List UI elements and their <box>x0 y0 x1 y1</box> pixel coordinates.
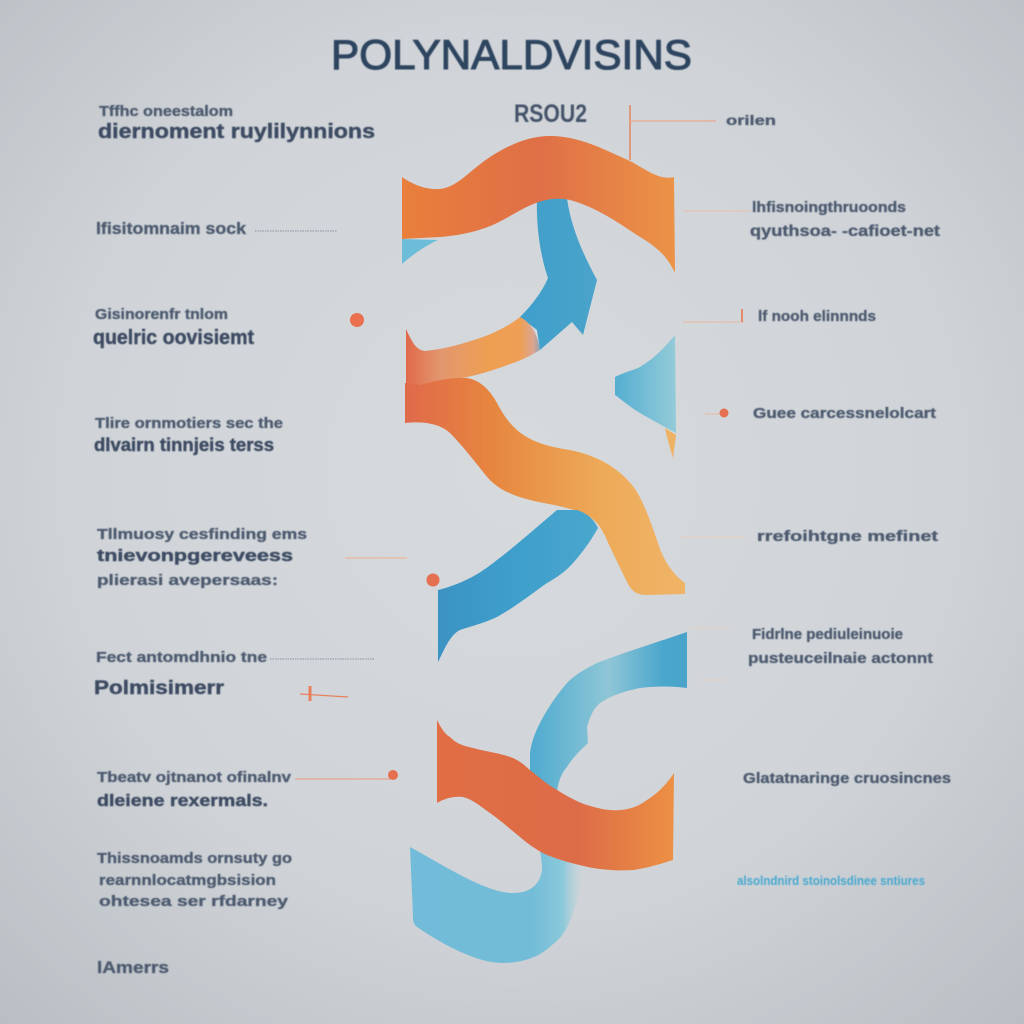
blue ribbon: lower middle <box>438 510 598 662</box>
ribbon diagram <box>402 136 687 963</box>
left label 7: dleiene rexermals. <box>97 791 268 810</box>
title: POLYNALDVISINS <box>331 31 692 78</box>
left label 8: Thissnoamds ornsuty go <box>97 850 292 867</box>
left label 7 <box>97 769 398 810</box>
center heading: RSOU2 <box>514 100 587 128</box>
orange into blue transition <box>406 317 540 386</box>
right label 7: Glatatnaringe cruosincnes <box>743 770 951 787</box>
orange ribbon: lower <box>437 720 674 870</box>
left label 2: lfisitomnaim sock <box>96 219 247 238</box>
left label 7: Tbeatv ojtnanot ofinalnv <box>97 769 292 786</box>
blue strand: top connector <box>520 198 597 350</box>
left label 5 <box>97 526 307 589</box>
right label 4: Guee carcessnelolcart <box>753 405 936 422</box>
left label 3: Gisinorenfr tnlom <box>95 306 228 323</box>
right label 1 with leader: orilen <box>726 112 776 128</box>
left label 1 <box>98 103 375 143</box>
right label 5: rrefoihtgne mefinet <box>757 528 938 545</box>
left label 4 <box>94 415 283 455</box>
light blue ribbon: bottom <box>410 847 584 963</box>
left label 1: Tffhc oneestalom <box>99 103 233 120</box>
right label 4 <box>705 405 936 422</box>
right label 2 <box>683 199 941 240</box>
left label 6: Polmisimerr <box>94 678 225 699</box>
left label 3 <box>93 306 254 349</box>
left label 5: Tllmuosy cesfinding ems <box>97 526 307 543</box>
blue wedge: right <box>615 335 676 433</box>
left label 1: diernoment ruylilynnions <box>98 121 375 143</box>
orange tip: right <box>665 428 676 458</box>
right label 3: lf nooh elinnnds <box>758 308 876 325</box>
marker cross <box>300 686 348 701</box>
left label 6 <box>94 649 374 699</box>
orange ribbon: long central <box>405 378 685 595</box>
left label 3: quelric oovisiemt <box>93 327 254 349</box>
marker dot <box>350 313 364 327</box>
left label 4: Tlire ornmotiers sec the <box>95 415 283 432</box>
right label 2: qyuthsoa- -cafioet-net <box>750 223 941 240</box>
orange ribbon: top <box>402 136 675 273</box>
right label 6 <box>690 626 933 680</box>
left label 9: lAmerrs <box>97 958 169 977</box>
marker with leader <box>345 558 440 586</box>
right label 8: alsolndnird stoinolsdinee sntiures <box>737 873 925 888</box>
left label 5: tnievonpgereveess <box>97 546 293 565</box>
left label 5: plierasi avepersaas: <box>97 572 278 589</box>
blue ribbon: upper right arc <box>530 632 687 792</box>
right label 6: pusteuceilnaie actonnt <box>748 650 933 667</box>
right label 2: lhfisnoingthruoonds <box>752 199 906 216</box>
left label 6: Fect antomdhnio tne <box>96 649 267 666</box>
right label 6: Fidrlne pediuleinuoie <box>752 626 903 643</box>
light blue wedge <box>402 239 438 264</box>
left label 8 <box>97 850 292 910</box>
left label 4: dlvairn tinnjeis terss <box>94 435 274 455</box>
left label 8: ohtesea ser rfdarney <box>99 893 289 910</box>
left label 8: rearnnlocatmgbsision <box>99 872 276 889</box>
